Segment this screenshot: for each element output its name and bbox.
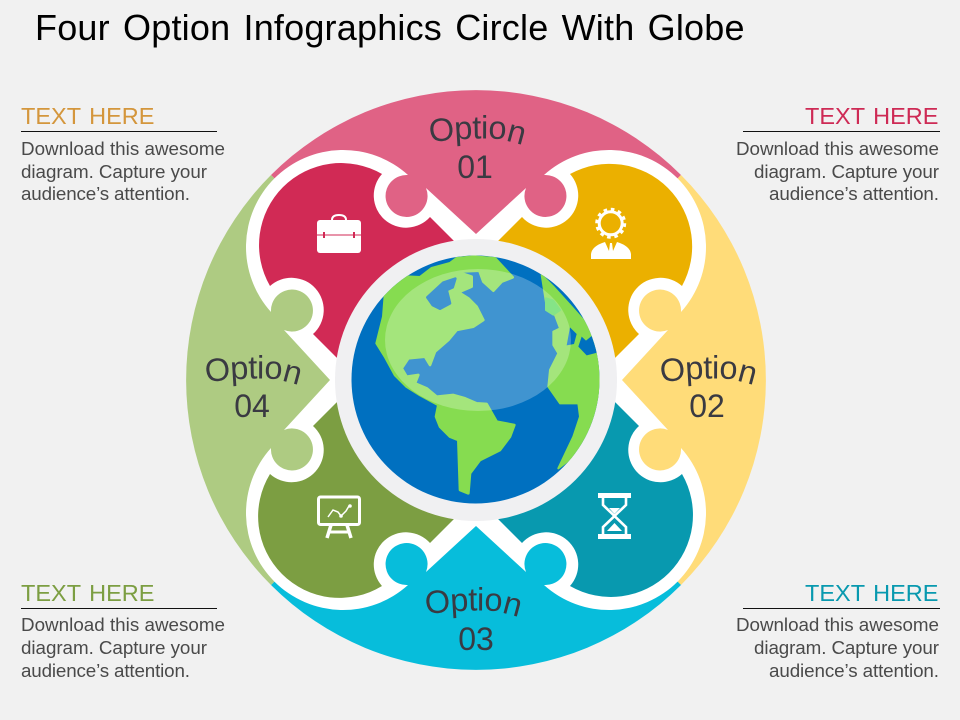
- wedge: option 02: [476, 175, 766, 585]
- text block: bottom left: Download this awesome: [21, 614, 225, 635]
- wedge: option 01: [271, 90, 681, 380]
- puzzle piece: bottom right teal: [476, 380, 706, 610]
- label: option 03: 03: [458, 621, 494, 657]
- icon: hourglass: [598, 493, 631, 539]
- label: option 02: [661, 355, 756, 424]
- text block: top right: diagram. Capture your: [754, 161, 939, 182]
- icon: briefcase: [317, 215, 361, 253]
- label: option 02: Option: [661, 355, 756, 386]
- label: option 03: [426, 587, 520, 657]
- text block: bottom right: Download this awesome: [736, 614, 939, 635]
- text block: bottom left: [21, 580, 225, 681]
- text block: bottom right: [736, 580, 940, 681]
- text block: bottom right: diagram. Capture your: [754, 637, 939, 658]
- outer ring wedges: [186, 90, 766, 670]
- puzzle piece: top left red: [246, 150, 476, 380]
- text block: top right: TEXT HERE: [805, 103, 938, 129]
- label: option 04: Option: [206, 355, 300, 386]
- text block: top left: audience’s attention.: [21, 183, 190, 204]
- label: option 02: 02: [689, 388, 725, 424]
- puzzle piece: bottom left green: [246, 380, 476, 610]
- wedge: option 04: [186, 175, 476, 585]
- puzzle piece: top right yellow: [476, 150, 706, 380]
- label: option 01: 01: [457, 149, 493, 185]
- globe highlight: [385, 269, 571, 411]
- text block: top right: audience’s attention.: [769, 183, 939, 204]
- text block: top left: Download this awesome: [21, 138, 225, 159]
- icon: presentation board: [318, 497, 360, 538]
- text block: bottom left: TEXT HERE: [21, 580, 154, 606]
- text block: top right: Download this awesome: [736, 138, 939, 159]
- label: option 04: [206, 355, 300, 424]
- label: option 03: Option: [426, 587, 520, 618]
- text block: top right: [736, 103, 940, 204]
- title: Four Option Infographics Circle With Globe: [35, 7, 745, 48]
- text block: top left: TEXT HERE: [21, 103, 154, 129]
- label: option 01: [430, 115, 524, 185]
- label: option 01: Option: [430, 115, 524, 146]
- text block: bottom right: TEXT HERE: [805, 580, 938, 606]
- label: option 04: 04: [234, 388, 270, 424]
- text block: bottom left: diagram. Capture your: [21, 637, 207, 658]
- text block: bottom right: audience’s attention.: [769, 660, 939, 681]
- globe: [335, 239, 617, 521]
- text block: bottom left: audience’s attention.: [21, 660, 190, 681]
- wedge: option 03: [271, 380, 681, 670]
- text block: top left: [21, 103, 225, 204]
- icon: gear person: [591, 209, 631, 259]
- text block: top left: diagram. Capture your: [21, 161, 207, 182]
